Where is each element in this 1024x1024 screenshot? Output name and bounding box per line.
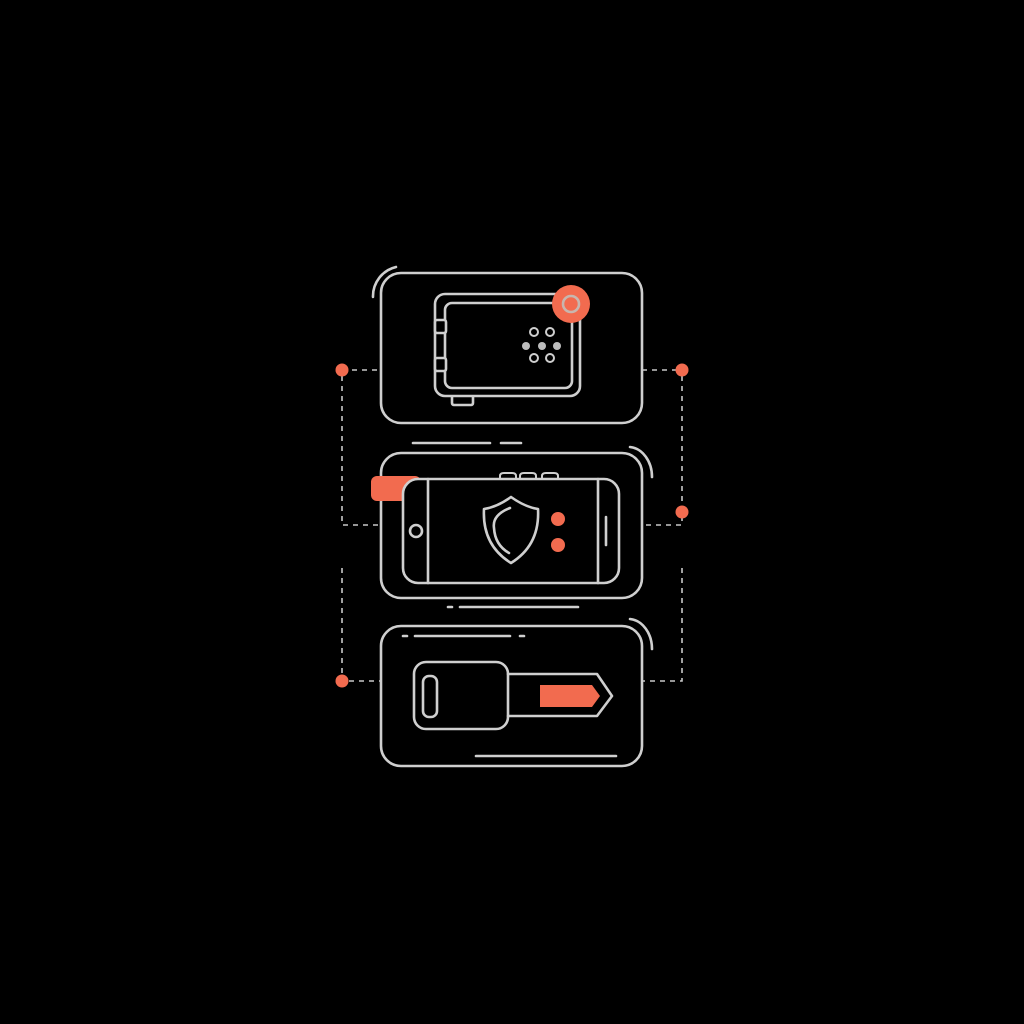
panel: key card: [381, 619, 652, 766]
orange tab: [371, 476, 421, 501]
icon: safe: [435, 285, 590, 405]
panel: safe card: [373, 267, 642, 423]
icon: phone: [403, 479, 619, 583]
phone buttons: [500, 473, 558, 479]
connectors: dashed lines: [342, 370, 682, 681]
panel: phone card: [371, 443, 652, 607]
connector dots: [336, 364, 688, 688]
icon: key: [414, 662, 612, 729]
icon: shield: [484, 497, 538, 563]
orange dots: [551, 512, 565, 526]
